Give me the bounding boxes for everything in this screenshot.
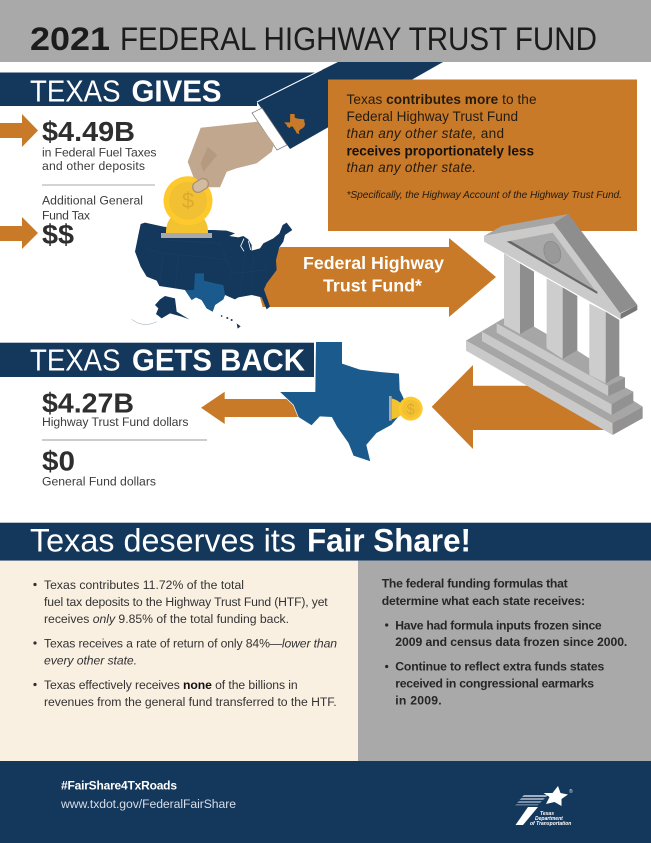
stat: additional general fund tax: Additional General bbox=[42, 194, 143, 208]
heading banner: Fair Share bbox=[0, 523, 651, 561]
callout: Texas contributes more bbox=[328, 80, 637, 231]
panel: Texas facts: revenues from the general fund transferred to the HTF. bbox=[44, 695, 337, 709]
stat: additional general fund tax: $$ bbox=[42, 219, 74, 250]
panel: Texas facts: Texas receives a rate of return of only 84%—lower than bbox=[44, 637, 337, 651]
panel: funding formulas: 2009 and census data frozen since 2000. bbox=[395, 635, 627, 649]
logo: Texas Department of Transportation: ® bbox=[569, 788, 573, 795]
panel: funding formulas: received in congressional earmarks bbox=[395, 677, 594, 691]
callout: Texas contributes more: than any other state, and bbox=[346, 126, 504, 141]
callout: Texas contributes more: Texas contributes more to the bbox=[346, 92, 536, 107]
panel: Texas facts bbox=[0, 561, 358, 761]
map: Texas bbox=[279, 342, 423, 462]
heading banner: Fair Share: Texas deserves its bbox=[30, 523, 296, 559]
footer bbox=[0, 761, 651, 843]
heading banner: Texas gets back bbox=[0, 343, 314, 378]
callout: Texas contributes more: *Specifically, the Highway Account of the Highway Trust Fund. bbox=[346, 190, 622, 201]
arrow: Texas gets back bbox=[201, 392, 300, 424]
stat: additional general fund tax: Fund Tax bbox=[42, 208, 90, 222]
logo: Texas Department of Transportation bbox=[515, 786, 573, 827]
stat: $0 general fund dollars bbox=[42, 446, 156, 489]
icon: hand bbox=[188, 122, 274, 187]
arrow: Federal Highway Trust Fund: Trust Fund* bbox=[323, 276, 422, 296]
panel: Texas facts: every other state. bbox=[44, 653, 137, 667]
title bar bbox=[0, 0, 651, 62]
icon: bank building bbox=[466, 214, 643, 435]
arrow: Federal Highway Trust Fund: Federal Highway bbox=[303, 253, 444, 273]
icon: coin leaving Texas bbox=[389, 396, 423, 421]
arrow: funds back from trust fund bbox=[432, 365, 620, 449]
panel: funding formulas: The federal funding formulas that bbox=[382, 577, 568, 591]
stat: $0 general fund dollars: General Fund dollars bbox=[42, 475, 156, 489]
stat: $0 general fund dollars: $0 bbox=[42, 446, 75, 477]
panel: Texas facts: Texas effectively receives none of the billions in bbox=[44, 678, 298, 692]
logo: Texas Department of Transportation: Department bbox=[535, 816, 563, 822]
icon: coin leaving Texas: $ bbox=[407, 402, 415, 418]
panel: funding formulas: in 2009. bbox=[395, 694, 442, 708]
heading banner: Texas gets back: TEXAS bbox=[30, 343, 120, 378]
stat: $4.27B highway trust fund dollars: Highway Trust Fund dollars bbox=[42, 415, 188, 429]
stat: $4.49B federal fuel taxes: $4.49B bbox=[42, 116, 135, 147]
panel: Texas facts: receives only 9.85% of the total funding back. bbox=[44, 612, 289, 626]
panel: Texas facts: fuel tax deposits to the Highway Trust Fund (HTF), yet bbox=[44, 595, 328, 609]
arrow: general fund tax in bbox=[0, 217, 38, 249]
panel: funding formulas: determine what each state receives: bbox=[382, 594, 585, 608]
stat: additional general fund tax bbox=[42, 194, 143, 250]
callout: Texas contributes more: than any other state. bbox=[346, 160, 476, 175]
panel: Texas facts: Texas contributes 11.72% of the total bbox=[44, 578, 244, 592]
stat: $4.49B federal fuel taxes: and other deposits bbox=[42, 159, 145, 173]
logo: Texas Department of Transportation: Texas bbox=[540, 811, 554, 817]
title bar: 2021 bbox=[30, 21, 110, 57]
panel: funding formulas: Have had formula inputs frozen since bbox=[395, 618, 602, 632]
hashtag: #FairShare4TxRoads bbox=[61, 778, 177, 792]
logo: Texas Department of Transportation: of Transportation bbox=[530, 821, 571, 827]
heading banner: Fair Share: Fair Share! bbox=[307, 523, 471, 559]
heading banner: Texas gives: TEXAS bbox=[30, 74, 120, 109]
icon: gold coin bbox=[161, 176, 212, 238]
stat: $4.27B highway trust fund dollars: $4.27B bbox=[42, 388, 134, 419]
callout: Texas contributes more: receives proportionately less bbox=[346, 144, 534, 158]
arrow: Federal Highway Trust Fund bbox=[258, 238, 496, 317]
heading banner: Texas gives: GIVES bbox=[132, 74, 222, 109]
icon: gold coin: $ bbox=[182, 188, 194, 213]
icon: jacket sleeve bbox=[252, 62, 443, 150]
stat: $4.49B federal fuel taxes bbox=[42, 116, 156, 173]
stat: $4.27B highway trust fund dollars bbox=[42, 388, 188, 429]
stat: $4.49B federal fuel taxes: in Federal Fuel Taxes bbox=[42, 146, 156, 160]
icon: hand depositing coin bbox=[161, 62, 443, 238]
title bar: FEDERAL HIGHWAY TRUST FUND bbox=[120, 21, 597, 57]
map: United States with Texas highlighted bbox=[132, 223, 292, 329]
website: www.txdot.gov/FederalFairShare bbox=[60, 797, 236, 811]
panel: funding formulas bbox=[358, 561, 651, 761]
heading banner: Texas gets back: GETS BACK bbox=[132, 343, 306, 378]
panel: funding formulas: Continue to reflect extra funds states bbox=[395, 660, 605, 674]
heading banner: Texas gives bbox=[0, 72, 316, 109]
arrow: fuel taxes in bbox=[0, 114, 38, 147]
callout: Texas contributes more: Federal Highway Trust Fund bbox=[346, 109, 518, 124]
